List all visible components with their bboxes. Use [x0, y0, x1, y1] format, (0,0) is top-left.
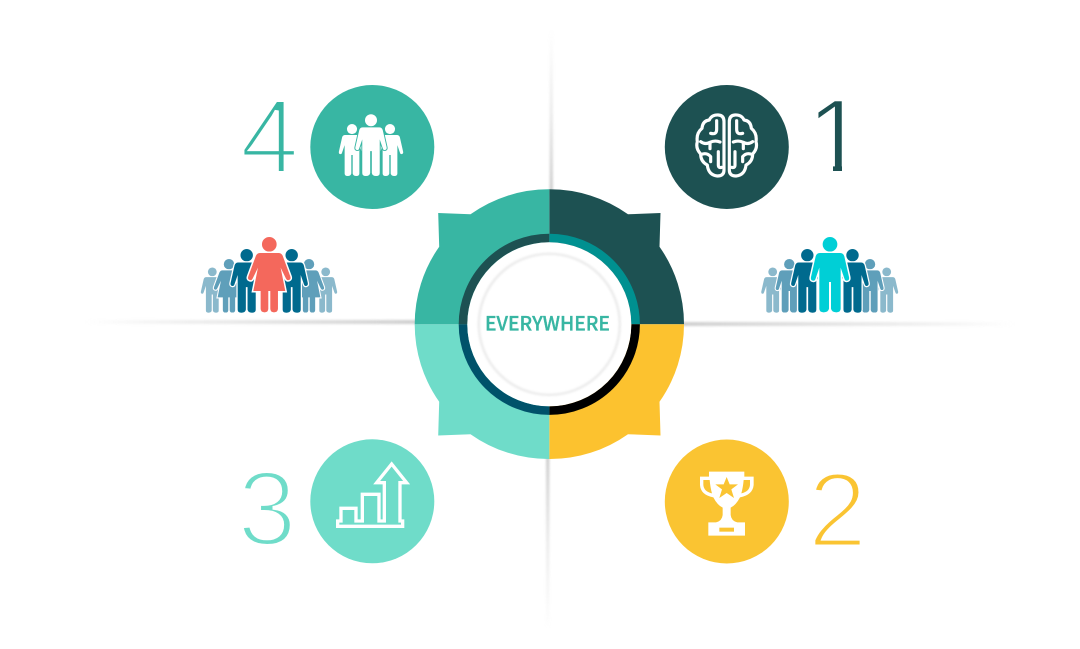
quadrant: yellow: [549, 324, 684, 459]
inner white disc: [467, 242, 631, 406]
quadrant: teal: [415, 189, 549, 324]
quadrant: dark green: [549, 189, 684, 324]
cross divider lines: [85, 30, 1015, 630]
center label: EVERYWHERE: [485, 308, 610, 337]
circle 1: [665, 85, 789, 209]
icon: trophy: [700, 472, 754, 536]
number 1: 1: [807, 78, 866, 196]
item 4: family: [240, 78, 434, 209]
icon: brain: [697, 115, 757, 176]
inner shadow ring: [479, 254, 620, 395]
circle 3: [310, 439, 434, 563]
item 3: growth: [238, 439, 434, 568]
crowd: right: [761, 237, 898, 313]
center badge: [415, 189, 684, 459]
infographic: [143, 74, 957, 582]
icon: growth chart: [338, 464, 407, 526]
icon: family: [339, 114, 403, 176]
quadrant: mint: [415, 324, 549, 459]
circle 2: [665, 440, 789, 564]
item 1: brain: [664, 85, 842, 209]
item 2: trophy: [665, 440, 867, 570]
ring segments: [463, 238, 636, 411]
number 2: 2: [808, 452, 867, 570]
number 3: 3: [238, 450, 296, 568]
circle 4: [310, 85, 434, 209]
crowd: left: [201, 237, 337, 313]
number 4: 4: [240, 78, 299, 196]
